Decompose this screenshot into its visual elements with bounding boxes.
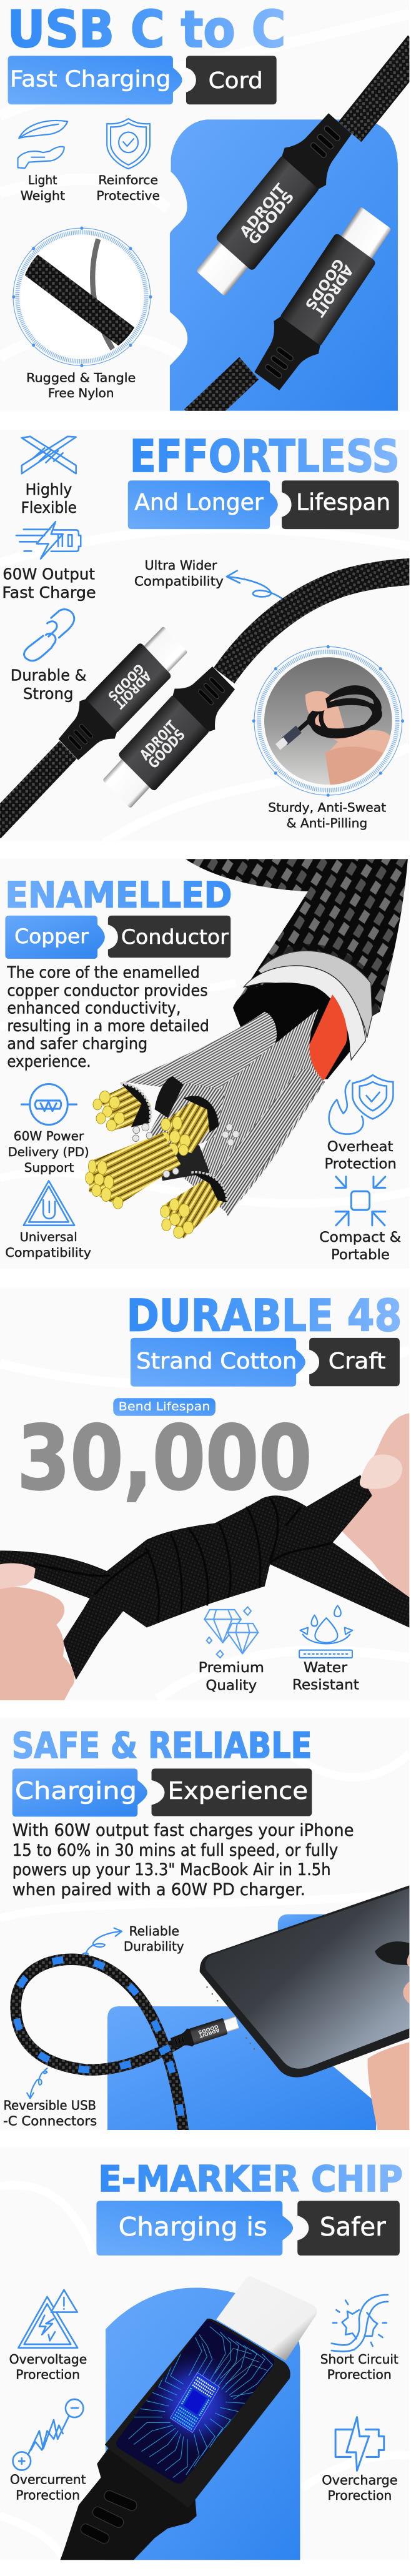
pill: Conductor — [108, 916, 230, 958]
cable jacket: carbon weave — [185, 859, 408, 1027]
icon: compact arrows — [335, 1177, 385, 1226]
wire: white filler strands — [132, 1123, 239, 1177]
connector: black strain relief — [61, 2446, 197, 2560]
label: Overcurrent Prorection: Prorection — [16, 2488, 80, 2503]
connector: upper USB-C plug: GOODS — [245, 188, 297, 248]
label: Overheat Protection: Overheat — [327, 1139, 393, 1155]
pill: Conductor: Conductor — [121, 926, 229, 949]
circuit screen — [112, 2318, 280, 2489]
blue backdrop panel — [170, 119, 398, 411]
label: Rugged and Tangle Free Nylon: Rugged & Tangle — [26, 370, 136, 385]
heading: SAFE and RELIABLE: SAFE & RELIABLE — [12, 1725, 312, 1766]
label: Reinforce Protective: Reinforce — [98, 172, 158, 187]
label: 60W Output Fast Charge — [2, 565, 96, 602]
pill: Craft — [309, 1338, 400, 1386]
label: Compact and Portable: Compact & — [319, 1230, 401, 1246]
blue backdrop panels — [107, 1915, 376, 2130]
panel: DURABLE 48 — [0, 1290, 409, 1700]
right hand — [340, 1413, 409, 1597]
heading: ENAMELLED: ENAMELLED — [5, 874, 232, 916]
label: 60W Power Delivery Support: Delivery (PD) — [8, 1145, 89, 1159]
label: 60W Output Fast Charge: 60W Output — [2, 565, 95, 583]
panel: E-MARKER CHIP — [0, 2159, 409, 2560]
icon: universal triangle — [24, 1181, 74, 1226]
connector: right USB-C plug: GOODS — [145, 726, 188, 772]
phone — [200, 1885, 409, 2078]
connector: left USB-C plug: GOODS — [105, 660, 146, 703]
pill: Safer: Safer — [320, 2211, 386, 2242]
icon: overheat shield — [329, 1075, 393, 1134]
label: Universal Compatibility: Universal — [19, 1231, 77, 1244]
pill: Lifespan — [282, 480, 399, 529]
cable: left braided cord — [0, 750, 68, 830]
badge: Bend Lifespan: Bend Lifespan — [119, 1400, 210, 1414]
label: Highly Flexible: Highly — [26, 481, 72, 498]
icon: short circuit spark — [332, 2295, 388, 2351]
connector: plug in phone: GOODS — [197, 2023, 219, 2035]
text block: enamelled copper description — [6, 963, 209, 1071]
label: Overcharge Prorection — [322, 2473, 398, 2503]
relief slots — [79, 2489, 138, 2545]
callout: Reliable Durability: Durability — [124, 1939, 184, 1954]
label: Overvoltage Prorection — [9, 2352, 87, 2382]
label: Durable and Strong: Durable & — [11, 666, 87, 685]
callout: Reliable Durability: Reliable — [129, 1924, 179, 1939]
icon: flexible cross — [22, 437, 76, 473]
pill: Strand Cotton — [131, 1338, 305, 1387]
icon: shield — [107, 119, 150, 169]
pill: Safer — [297, 2201, 400, 2256]
cable: upper braided cord — [350, 46, 411, 132]
pill: Copper: Copper — [14, 925, 89, 948]
label: Overcurrent Prorection — [10, 2472, 86, 2503]
label: Premium Quality: Premium — [199, 1660, 264, 1676]
label: Universal Compatibility — [5, 1231, 91, 1260]
text block: enamelled copper description: copper conductor provides — [7, 981, 208, 999]
icon: overvoltage triangle — [18, 2290, 77, 2348]
label: Overcharge Prorection: Prorection — [328, 2489, 392, 2503]
text block: charging description: powers up your 13.3" MacBook Air in 1.5h — [12, 1861, 331, 1880]
badge: Bend Lifespan — [113, 1398, 215, 1416]
knot: braided cable — [0, 1475, 409, 1680]
panel: ENAMELLED — [0, 859, 409, 1263]
heading: E-MARKER CHIP: E-MARKER CHIP — [98, 2159, 403, 2200]
panel: SAFE and RELIABLE — [0, 1725, 409, 2133]
pill: Charging is — [96, 2201, 293, 2256]
pill: Cord — [186, 56, 277, 104]
label: Overheat Protection — [324, 1139, 397, 1172]
label: Overcharge Prorection: Overcharge — [322, 2473, 398, 2488]
label: Short Circuit Prorection: Short Circuit — [320, 2352, 399, 2367]
label: Overvoltage Prorection: Prorection — [16, 2367, 80, 2382]
wire: gold bundle B — [159, 1096, 219, 1157]
icon: overcurrent zigzag — [13, 2399, 83, 2470]
pill: Charging — [12, 1768, 147, 1816]
connector: right USB-C plug: ADROIT — [137, 717, 180, 763]
text block: enamelled copper description: The core of the enamelled — [6, 963, 200, 982]
label: Premium Quality — [199, 1660, 264, 1694]
wire: gold bundle C — [86, 1132, 181, 1209]
callout: Reversible USB-C Connectors — [3, 2068, 97, 2129]
connector: metal USB-C tip — [216, 2276, 317, 2361]
label: Water Resistant — [292, 1660, 359, 1693]
pill: And Longer: And Longer — [134, 490, 264, 516]
label: Compact and Portable: Portable — [331, 1247, 390, 1263]
label: Universal Compatibility: Compatibility — [5, 1246, 91, 1260]
pill: Charging: Charging — [15, 1776, 137, 1805]
label: 60W Power Delivery Support: Support — [24, 1161, 74, 1175]
connector: plug in phone: ADROIT — [198, 2027, 220, 2039]
connector: lower USB-C plug: GOODS — [302, 255, 347, 312]
connector: right USB-C plug — [103, 666, 235, 808]
left hand — [0, 1563, 74, 1700]
text block: enamelled copper description: and safer charging — [7, 1034, 147, 1053]
text block: charging description: when paired with a 60W PD charger. — [12, 1880, 305, 1900]
callout: Reversible USB-C Connectors: -C Connectors — [3, 2114, 97, 2129]
pill: Charging is: Charging is — [119, 2211, 267, 2242]
connector: lower USB-C plug — [254, 207, 391, 390]
label: Highly Flexible — [22, 482, 76, 513]
pill: Craft: Craft — [329, 1349, 386, 1374]
pill: Copper — [5, 916, 105, 959]
wire: silver strand bundles — [123, 1009, 325, 1217]
text block: enamelled copper description: enhanced conductivity, — [7, 999, 181, 1018]
wire: gold bundle D — [161, 1172, 227, 1239]
label: 60W Power Delivery Support: 60W Power — [14, 1129, 84, 1144]
wire: gold bundle A — [93, 1083, 151, 1131]
wire: black opening — [233, 983, 350, 1082]
connector: plug in phone — [169, 2013, 240, 2052]
label: Sturdy Anti-Sweat and Anti-Pilling: & Anti-Pilling — [287, 816, 367, 831]
blue backdrop panel — [106, 2287, 300, 2560]
panel: EFFORTLESS — [0, 431, 411, 843]
wire: red core — [309, 994, 347, 1081]
pill: Experience — [152, 1768, 312, 1816]
pill: Fast Charging — [8, 56, 182, 104]
cable: lower braided cord — [194, 369, 249, 420]
connector: left USB-C plug — [59, 627, 187, 760]
connector: black housing — [105, 2319, 290, 2508]
label: Durable and Strong — [11, 666, 87, 703]
label: Rugged and Tangle Free Nylon: Free Nylon — [48, 385, 114, 400]
heading: USB C to C: USB C to C — [7, 0, 285, 59]
label: Short Circuit Prorection: Prorection — [327, 2367, 392, 2382]
icon: premium diamonds — [204, 1607, 258, 1658]
icon: overcharge battery — [335, 2417, 384, 2470]
callout: Reversible USB-C Connectors: Reversible USB — [3, 2098, 96, 2113]
pill: Strand Cotton: Strand Cotton — [136, 1349, 297, 1374]
connector: lower USB-C plug: ADROIT — [311, 262, 356, 319]
label: Light Weight: Weight — [21, 188, 65, 203]
pill: Lifespan: Lifespan — [296, 490, 390, 516]
detail circle: braided nylon — [12, 227, 152, 367]
callout: Ultra Wider Compatibility: Ultra Wider — [145, 558, 217, 573]
label: Overcurrent Prorection: Overcurrent — [10, 2472, 86, 2487]
icon: feather and hand — [18, 121, 67, 168]
panel: USB C to C — [0, 0, 411, 420]
callout: Ultra Wider Compatibility: Compatibility — [134, 574, 224, 589]
hand holding phone — [368, 1954, 409, 2130]
label: Reinforce Protective — [97, 175, 160, 200]
label: Overvoltage Prorection: Overvoltage — [9, 2352, 87, 2367]
label: Water Resistant: Resistant — [292, 1677, 359, 1693]
pill: Cord: Cord — [209, 68, 263, 94]
label: Durable and Strong: Strong — [23, 685, 73, 703]
label: Premium Quality: Quality — [206, 1678, 257, 1694]
pill: Experience: Experience — [168, 1776, 308, 1805]
text block: charging description — [12, 1821, 354, 1900]
callout: Reliable Durability — [82, 1924, 184, 1956]
icon: fast battery — [16, 522, 81, 559]
stat: 30,000: 30,000 — [17, 1407, 312, 1510]
pill: And Longer — [128, 480, 278, 529]
label: Water Resistant: Water — [304, 1660, 347, 1676]
icon: water resistant — [299, 1605, 352, 1658]
pill: Fast Charging: Fast Charging — [10, 67, 171, 92]
label: Sturdy Anti-Sweat and Anti-Pilling — [268, 800, 387, 831]
label: Reinforce Protective: Protective — [96, 188, 160, 203]
text block: charging description: 15 to 60% in 30 mins at full speed, or fully — [12, 1841, 338, 1860]
cable shield: silver braid — [258, 951, 372, 1038]
icon: chain link — [24, 610, 74, 661]
label: 60W Output Fast Charge: Fast Charge — [2, 584, 96, 602]
label: 60W Power Delivery Support — [8, 1129, 89, 1175]
detail circle: coiled cable in hand — [252, 645, 404, 797]
text block: enamelled copper description: resulting in a more detailed — [7, 1017, 209, 1035]
label: Compact and Portable — [319, 1230, 401, 1263]
cable shield: white inner ring — [244, 966, 365, 1060]
connector: left USB-C plug: ADROIT — [112, 668, 154, 711]
label: Short Circuit Prorection — [320, 2352, 399, 2382]
cable: blue-marked braid loop — [16, 1959, 184, 2133]
text block: charging description: With 60W output fast charges your iPhone — [12, 1821, 354, 1840]
right thumb — [360, 1455, 402, 1489]
connector: upper USB-C plug — [197, 113, 352, 295]
text block: enamelled copper description: experience. — [7, 1052, 91, 1071]
label: Highly Flexible: Flexible — [21, 499, 77, 517]
icon: 60W power — [21, 1084, 77, 1125]
label: Overheat Protection: Protection — [324, 1156, 397, 1172]
callout: Ultra Wider Compatibility — [135, 560, 283, 604]
label: Rugged and Tangle Free Nylon — [26, 370, 136, 400]
label: Light Weight — [21, 172, 65, 203]
cable: main braided cord — [224, 571, 411, 676]
connector: upper USB-C plug: ADROIT — [237, 181, 289, 240]
label: Sturdy Anti-Sweat and Anti-Pilling: Sturdy, Anti-Sweat — [268, 800, 387, 815]
label: Light Weight: Light — [28, 172, 57, 187]
